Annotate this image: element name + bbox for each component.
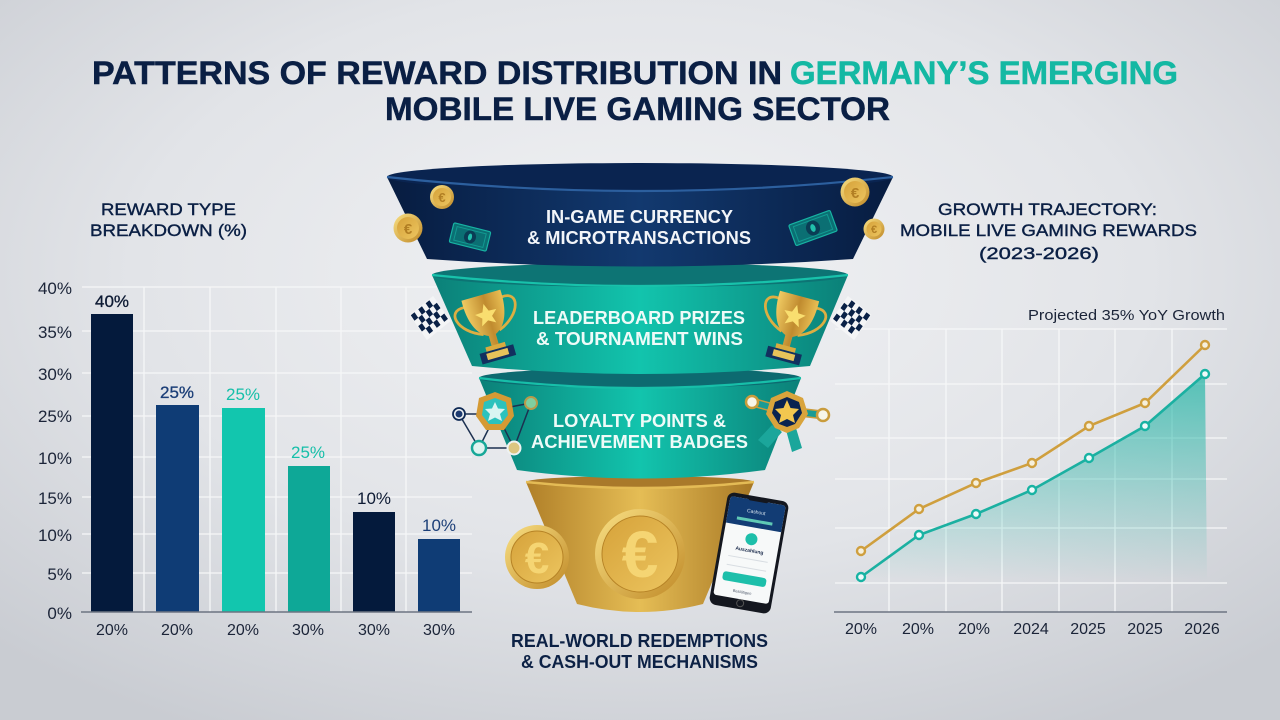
x axis labels xyxy=(845,621,1220,638)
x axis labels: 30% xyxy=(423,622,455,639)
funnel xyxy=(387,163,893,612)
x axis labels: 20% xyxy=(96,622,128,639)
bar chart: reward type breakdown xyxy=(38,279,472,639)
x axis labels: 2026 xyxy=(1184,621,1220,638)
icon: network badge xyxy=(453,392,537,455)
x axis labels: 2025 xyxy=(1127,621,1163,638)
right chart heading xyxy=(900,200,1197,263)
x axis labels: 2024 xyxy=(1013,621,1049,638)
x axis labels: 30% xyxy=(292,622,324,639)
title: MOBILE LIVE GAMING SECTOR xyxy=(385,91,890,127)
bar value labels xyxy=(95,292,456,535)
bar value labels: 40% xyxy=(95,292,129,311)
tier 3 label: LOYALTY POINTS & xyxy=(553,410,726,431)
icon: checkered flag left xyxy=(410,296,450,340)
icon: banknote right xyxy=(789,210,837,246)
title: GERMANY’S EMERGING xyxy=(790,55,1178,91)
x axis labels: 20% xyxy=(902,621,934,638)
tier 3 label: ACHIEVEMENT BADGES xyxy=(531,431,748,452)
tier 1 label: & MICROTRANSACTIONS xyxy=(527,227,751,248)
icon: smartphone: Cashout xyxy=(746,508,766,517)
icons: euro coins on top tier: € xyxy=(438,190,446,205)
icon: smartphone: Bestätigen xyxy=(732,588,752,596)
funnel tier 2: teal xyxy=(432,263,848,374)
right chart heading: GROWTH TRAJECTORY: xyxy=(938,200,1157,219)
x axis labels: 2025 xyxy=(1070,621,1106,638)
chart note: Projected 35% YoY Growth xyxy=(1028,307,1225,324)
funnel bottom caption: & CASH-OUT MECHANISMS xyxy=(521,651,758,672)
funnel tier 1: navy xyxy=(387,163,893,266)
icons: euro coins on top tier: € xyxy=(851,185,860,202)
icon: checkered flag right xyxy=(831,296,871,340)
x axis labels: 20% xyxy=(161,622,193,639)
tier 3 label xyxy=(531,410,748,452)
y axis labels: 15% xyxy=(38,489,72,508)
tier 1 label: IN-GAME CURRENCY xyxy=(546,206,734,227)
tier 2 label: LEADERBOARD PRIZES xyxy=(533,307,745,328)
x axis labels: 20% xyxy=(227,622,259,639)
baseline xyxy=(81,611,472,613)
x axis labels xyxy=(96,622,455,639)
y axis labels: 25% xyxy=(38,407,72,426)
bar value labels: 25% xyxy=(226,385,260,404)
icon: small euro coin: € xyxy=(525,534,549,583)
funnel tier 4: gold xyxy=(526,476,754,612)
shaded area xyxy=(861,374,1207,580)
x axis labels: 20% xyxy=(845,621,877,638)
icons: euro coins on top tier: € xyxy=(871,224,877,236)
tier 2 label xyxy=(533,307,745,349)
icon: trophy left xyxy=(451,287,529,368)
y axis labels: 40% xyxy=(38,279,72,298)
funnel bottom caption xyxy=(511,630,768,672)
x axis labels: 30% xyxy=(358,622,390,639)
y axis labels: 30% xyxy=(38,365,72,384)
y axis labels: 10% xyxy=(38,526,72,545)
bar value labels: 25% xyxy=(160,383,194,402)
right chart heading: MOBILE LIVE GAMING REWARDS xyxy=(900,221,1197,240)
tier 1 label xyxy=(527,206,751,248)
icons: euro coins on top tier: € xyxy=(404,221,413,238)
teal line xyxy=(857,370,1209,581)
icon: banknote left xyxy=(449,223,491,251)
title xyxy=(92,55,1178,127)
icon: star medal badge xyxy=(746,391,829,452)
bar value labels: 25% xyxy=(291,443,325,462)
y axis labels xyxy=(38,279,72,623)
y axis labels: 5% xyxy=(47,565,72,584)
tier 2 label: & TOURNAMENT WINS xyxy=(536,328,743,349)
left chart heading: REWARD TYPE xyxy=(101,200,236,219)
x axis labels: 20% xyxy=(958,621,990,638)
left chart heading xyxy=(90,200,247,240)
funnel bottom caption: REAL-WORLD REDEMPTIONS xyxy=(511,630,768,651)
icon: small euro coin xyxy=(505,525,569,589)
icon: large euro coin xyxy=(595,509,685,599)
icon: trophy right xyxy=(752,288,829,369)
bar value labels: 10% xyxy=(422,516,456,535)
bars xyxy=(91,314,460,612)
left chart heading: BREAKDOWN (%) xyxy=(90,221,247,240)
icon: large euro coin: € xyxy=(622,517,658,591)
icon: smartphone xyxy=(709,491,789,615)
line chart: growth trajectory xyxy=(834,307,1227,638)
y axis labels: 35% xyxy=(38,323,72,342)
right chart heading: (2023-2026) xyxy=(979,244,1099,263)
bar value labels: 10% xyxy=(357,489,391,508)
gold line xyxy=(857,341,1209,555)
y axis labels: 0% xyxy=(47,604,72,623)
funnel tier 3: teal xyxy=(479,368,801,478)
title: PATTERNS OF REWARD DISTRIBUTION IN xyxy=(92,55,782,91)
icon: smartphone: Auszahlung xyxy=(735,546,764,556)
y axis labels: 10% xyxy=(38,449,72,468)
icons: euro coins on top tier xyxy=(394,178,884,242)
